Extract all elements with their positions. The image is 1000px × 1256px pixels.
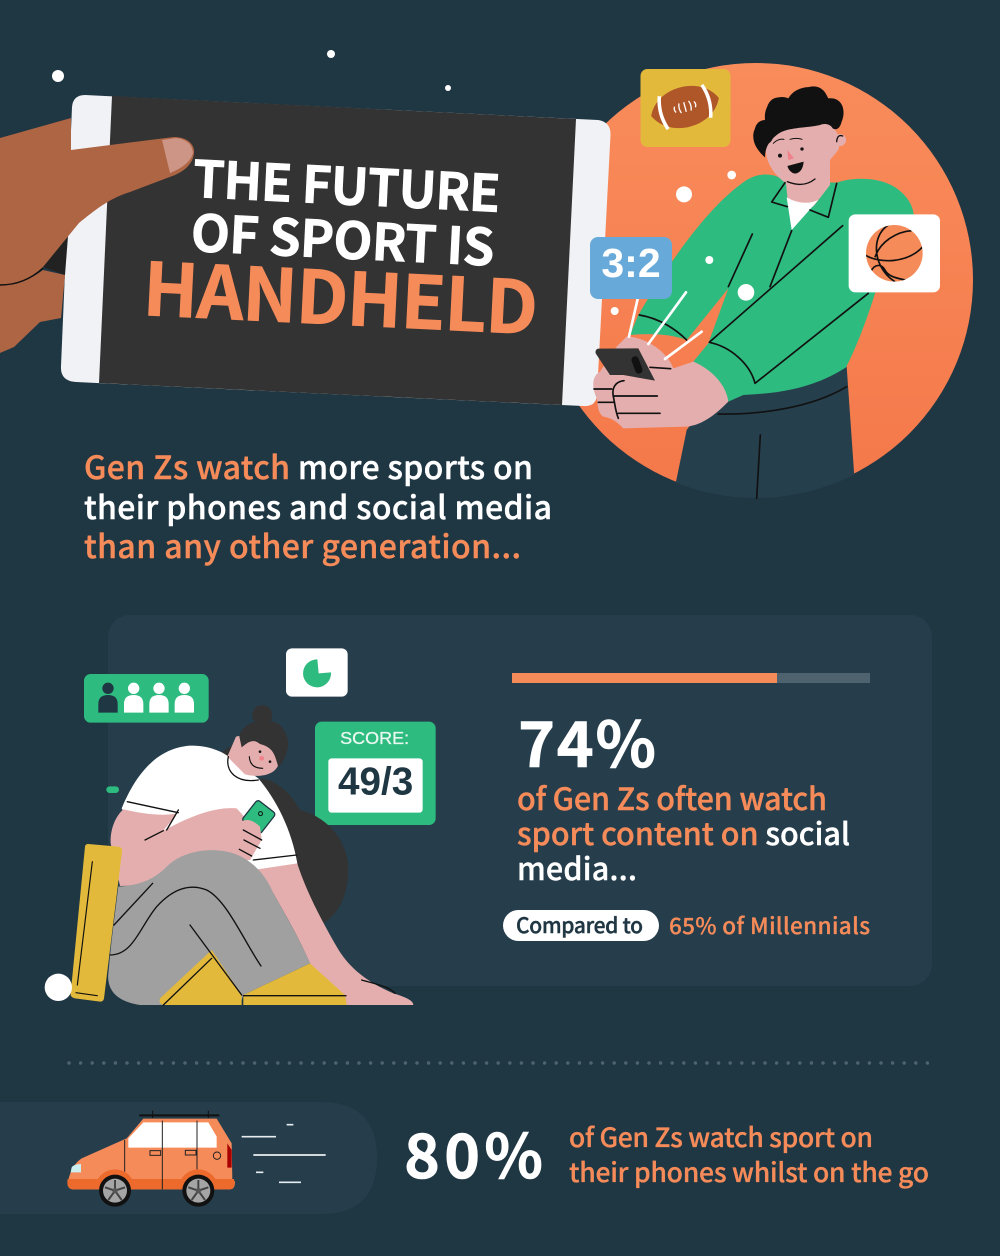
long hair [253,779,348,927]
intro text: than any other generation... [84,522,521,568]
panel: 74% stat [108,615,932,986]
man's phone [596,348,655,381]
card: american football [640,69,730,147]
woman's phone [242,800,276,834]
card: score 49/3: 49/3 [338,760,413,803]
man's face details [773,136,843,184]
card: score 3:2 [590,237,672,299]
jacket lines [639,183,868,498]
intro text [84,443,552,568]
t-shirt [122,746,297,870]
stat 80% description: their phones whilst on the go [569,1151,929,1190]
panel: car [0,1102,377,1214]
arm reaching to foot [253,862,413,1005]
phone with hand [0,95,611,406]
intro text: Gen Zs watch more sports on [84,443,533,489]
stat 80%: 80% [404,1107,543,1196]
woman [71,705,413,1005]
title: OF SPORT IS [189,192,497,281]
yellow cricket pad [71,844,122,1002]
illustration: man watching sport on phone [593,86,940,527]
pill: compared to: Compared to [516,910,643,940]
arm and forearm [111,808,262,886]
icon: car [67,1111,326,1207]
man's head [766,119,839,207]
small green pill [106,786,119,793]
finger lines [594,367,671,418]
man's trousers [676,366,854,498]
stat 74%: 74% [518,695,656,786]
title: HANDHELD [141,231,541,356]
decorative dots [52,50,451,91]
orange circle [539,63,973,497]
intro text: their phones and social media [84,483,552,529]
title [141,138,541,356]
card: pie chart [286,648,348,697]
head and hair [227,705,288,776]
hand [0,118,194,353]
stat 80% description: of Gen Zs watch sport on [569,1116,873,1155]
hand fingers [235,820,262,860]
card: basketball [849,214,940,292]
card: score 3:2: 3:2 [601,240,661,286]
leggings [108,850,310,1005]
man's hands [593,337,728,428]
title: THE FUTURE [191,138,503,227]
white ball [45,974,72,1001]
progress bar [512,673,870,683]
stat description [517,775,850,889]
white dots [611,171,754,315]
clothing lines [110,757,395,1005]
man's hair [753,86,844,157]
motion lines [629,292,702,359]
illustration: woman with phone [45,648,436,1005]
dotted divider [69,1061,938,1065]
stat description: of Gen Zs often watch [517,775,827,819]
card: score 49/3 [315,722,436,825]
stat 80% description [569,1116,929,1190]
card: score 49/3: SCORE: [340,728,409,748]
stat description: sport content on social [517,810,850,854]
man's jacket [630,175,914,402]
yellow shoes [160,950,347,1005]
card: audience icons [84,674,209,723]
stat description: media... [517,845,637,889]
comparison text: 65% of Millennials [669,909,870,941]
